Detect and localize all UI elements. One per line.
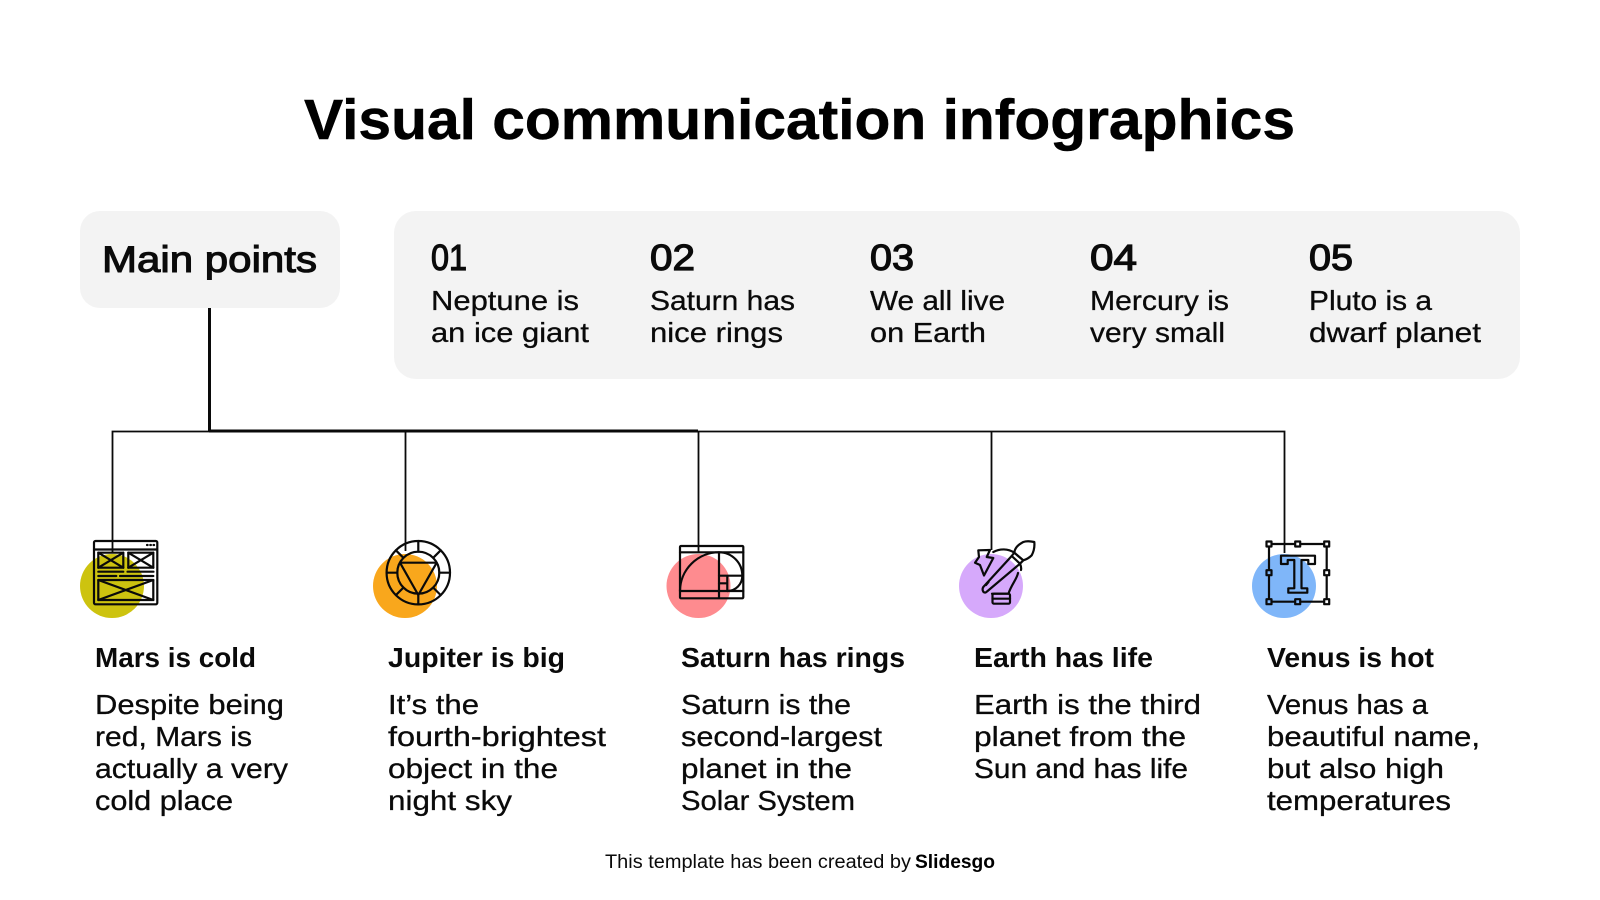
column: Venus: but also high bbox=[1267, 753, 1444, 784]
column: Mars: cold place bbox=[95, 785, 233, 816]
column: Venus: Venus has a bbox=[1267, 689, 1429, 720]
column: Saturn: Saturn has rings bbox=[681, 642, 905, 673]
column: Earth bbox=[974, 642, 1201, 784]
point 04 bbox=[1090, 237, 1229, 348]
footer credit: This template has been created by bbox=[605, 852, 912, 873]
icon: golden ratio bbox=[680, 546, 743, 598]
column: Jupiter: Jupiter is big bbox=[388, 642, 565, 673]
point 04: 04 bbox=[1090, 237, 1137, 278]
point 02: nice rings bbox=[650, 317, 783, 348]
point 04: Mercury is bbox=[1090, 285, 1229, 316]
column: Saturn: Saturn is the bbox=[681, 689, 851, 720]
column: Earth: Earth has life bbox=[974, 642, 1153, 673]
icon: wireframe bbox=[94, 541, 157, 604]
title: Visual communication infographics bbox=[304, 88, 1295, 152]
column: Jupiter: It’s the bbox=[388, 689, 479, 720]
column: Earth: Sun and has life bbox=[974, 753, 1188, 784]
icon backdrop circles bbox=[80, 554, 1316, 618]
point 05: dwarf planet bbox=[1309, 317, 1481, 348]
column: Mars: red, Mars is bbox=[95, 721, 252, 752]
point 05: 05 bbox=[1309, 237, 1353, 278]
column: Venus bbox=[1267, 642, 1480, 816]
column: Mars: Mars is cold bbox=[95, 642, 256, 673]
column: Earth: Earth is the third bbox=[974, 689, 1201, 720]
column: Venus: temperatures bbox=[1267, 785, 1451, 816]
column: Saturn: planet in the bbox=[681, 753, 852, 784]
point 02: 02 bbox=[650, 237, 695, 278]
icon: bulb and brush bbox=[975, 541, 1034, 604]
point 03: 03 bbox=[870, 237, 914, 278]
column: Mars: Despite being bbox=[95, 689, 284, 720]
point 03: on Earth bbox=[870, 317, 986, 348]
point 01: 01 bbox=[431, 237, 467, 278]
point 02: Saturn has bbox=[650, 285, 795, 316]
column: Venus: Venus is hot bbox=[1267, 642, 1434, 673]
column: Jupiter bbox=[388, 642, 606, 816]
point 03: We all live bbox=[870, 285, 1005, 316]
column: Jupiter: object in the bbox=[388, 753, 558, 784]
column: Saturn bbox=[681, 642, 905, 816]
column: Venus: beautiful name, bbox=[1267, 721, 1480, 752]
point 05 bbox=[1309, 237, 1481, 348]
column: Jupiter: night sky bbox=[388, 785, 512, 816]
point 04: very small bbox=[1090, 317, 1225, 348]
point 05: Pluto is a bbox=[1309, 285, 1433, 316]
point 01: an ice giant bbox=[431, 317, 589, 348]
column: Saturn: Solar System bbox=[681, 785, 855, 816]
column: Saturn: second-largest bbox=[681, 721, 882, 752]
point 01: Neptune is bbox=[431, 285, 579, 316]
column: Mars: actually a very bbox=[95, 753, 288, 784]
column: Jupiter: fourth-brightest bbox=[388, 721, 606, 752]
point 01 bbox=[431, 237, 589, 348]
point 02 bbox=[650, 237, 795, 348]
footer credit: Slidesgo bbox=[915, 852, 995, 873]
panel: main points bbox=[80, 211, 340, 308]
point 03 bbox=[870, 237, 1005, 348]
panel: main points: Main points bbox=[102, 239, 317, 280]
connector tree bbox=[112, 308, 1284, 553]
panel: numbered points bbox=[394, 211, 1520, 379]
icon: colour wheel bbox=[387, 541, 450, 604]
column: Mars bbox=[95, 642, 288, 816]
icon: text box bbox=[1266, 542, 1329, 604]
column: Earth: planet from the bbox=[974, 721, 1186, 752]
